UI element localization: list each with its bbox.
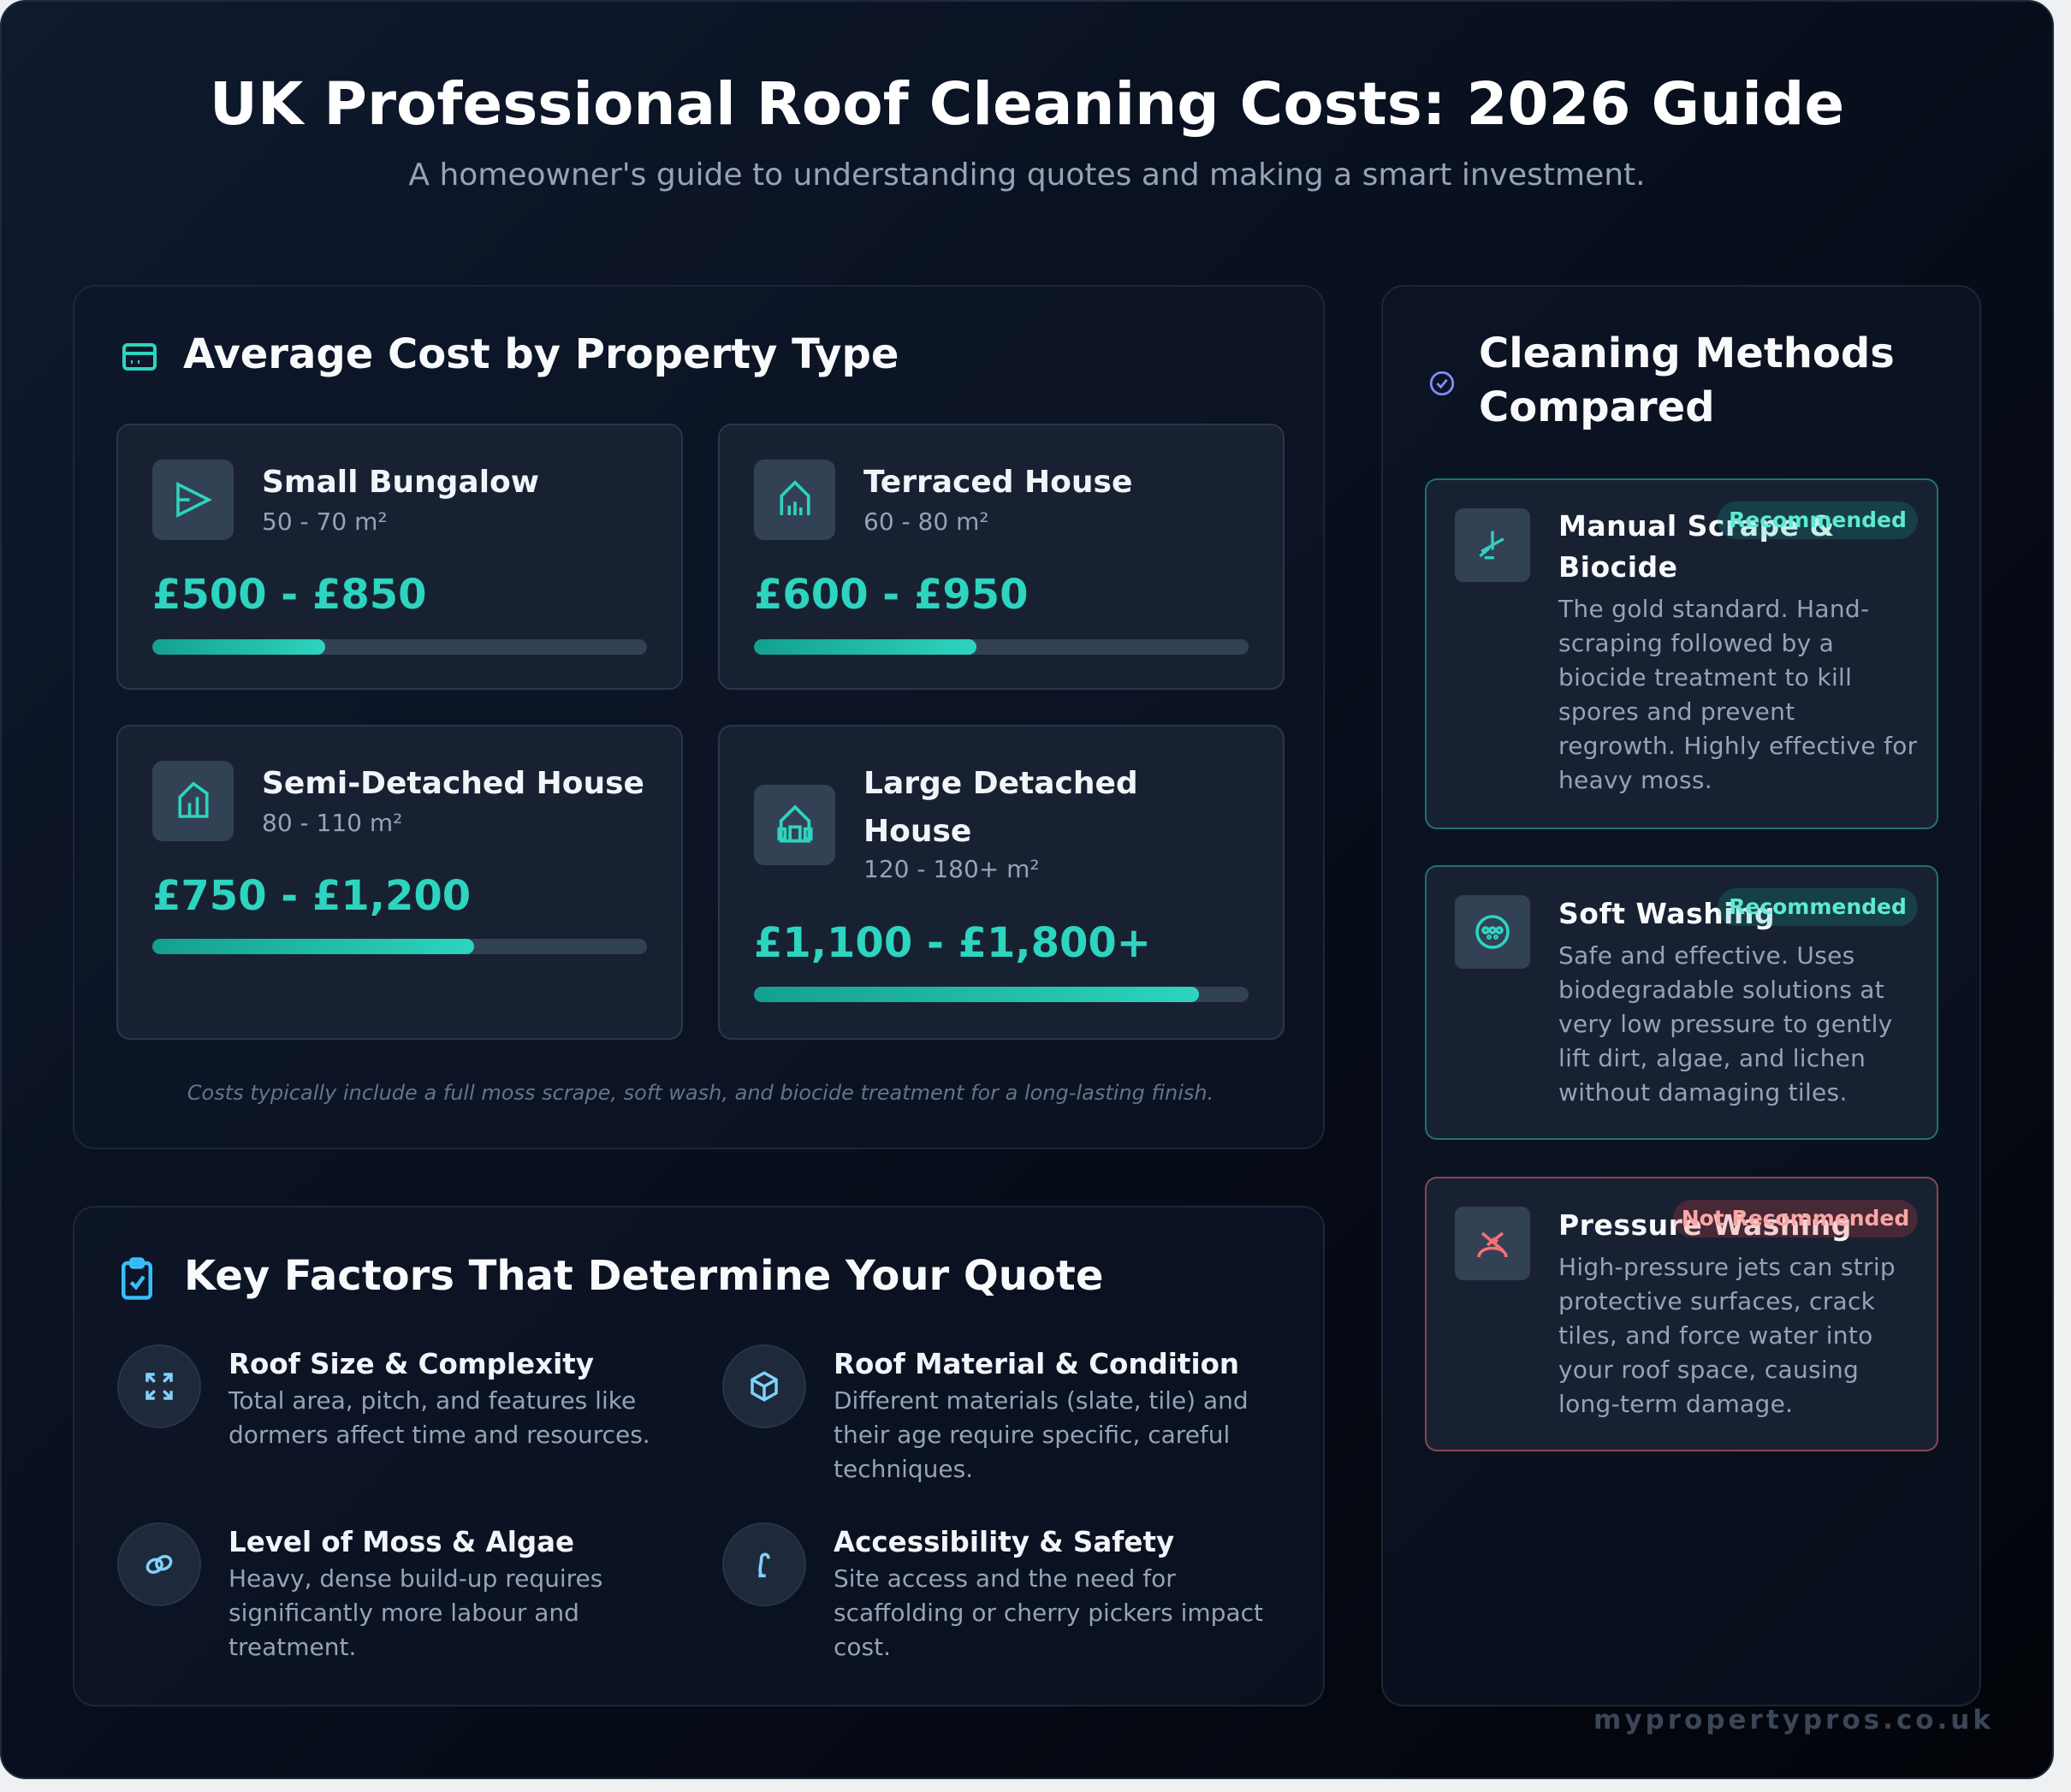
panel: cleaning methods: [1381, 285, 1981, 1706]
heading: Cleaning Methods: [1479, 329, 1895, 377]
factor: accessibility: Site access and the need for scaffolding or cherry pickers impact cost.: [834, 1564, 1263, 1661]
icon: semi: [152, 761, 234, 841]
method: pressure washing: [1425, 1177, 1938, 1451]
factor: material: Roof Material & Condition: [834, 1348, 1239, 1380]
heading: [1479, 329, 1895, 431]
method: soft washing: Soft Washing: [1558, 897, 1775, 930]
card: large detached: £1,100 - £1,800+: [754, 919, 1151, 967]
factor: roof size: Total area, pitch, and features like dormers affect time and resources.: [228, 1386, 650, 1449]
badge: Not Recommended: [1682, 1206, 1909, 1231]
method: manual scrape: Manual Scrape & Biocide: [1558, 509, 1835, 584]
badge: [1718, 888, 1918, 926]
icon: clipboard: [122, 1257, 152, 1300]
card: terraced: Terraced House: [863, 465, 1132, 500]
method: manual scrape: scraping followed by a: [1558, 629, 1834, 657]
method: manual scrape: spores and prevent: [1558, 697, 1795, 726]
card: small bungalow: 50 - 70 m²: [262, 507, 388, 536]
card: terraced: £600 - £950: [754, 571, 1029, 619]
card: small bungalow: £500 - £850: [152, 571, 427, 619]
title: UK Professional Roof Cleaning Costs: 2026 Guide: [210, 70, 1844, 139]
factor: accessibility: [722, 1522, 1263, 1661]
icon: check circle: [1429, 371, 1455, 395]
icon: scrape: [1455, 508, 1530, 582]
panel: average cost: [73, 285, 1325, 1149]
card: large detached: 120 - 180+ m²: [863, 855, 1040, 883]
badge: Recommended: [1729, 894, 1907, 919]
method: manual scrape: biocide treatment to kill: [1558, 663, 1852, 691]
heading: Key Factors That Determine Your Quote: [184, 1252, 1103, 1300]
icon: detached: [754, 785, 835, 865]
card: small bungalow: [116, 424, 683, 690]
icon: soft wash: [1455, 895, 1530, 969]
factor: roof size: Roof Size & Complexity: [228, 1348, 594, 1380]
card: small bungalow: Small Bungalow: [262, 465, 539, 500]
card: large detached: [718, 725, 1285, 1040]
method: pressure washing: High-pressure jets can strip protective surfaces, crack tiles, and force water into your roof space, causing long-term damage.: [1558, 1253, 1896, 1418]
factor: moss: Heavy, dense build-up requires significantly more labour and treatment.: [228, 1564, 602, 1661]
factor: material: Different materials (slate, tile) and their age require specific, careful techniques.: [834, 1386, 1249, 1483]
method: soft washing: Safe and effective. Uses biodegradable solutions at very low pressure to gently lift dirt, algae, and lichen without damaging tiles.: [1558, 941, 1893, 1107]
factor: roof size: [117, 1344, 650, 1449]
method: soft washing: [1425, 865, 1938, 1140]
icon: card: [122, 343, 157, 371]
badge: [1673, 1200, 1918, 1237]
factor: material: [722, 1344, 1249, 1483]
method: manual scrape: The gold standard. Hand-: [1558, 595, 1869, 623]
factor: accessibility: Accessibility & Safety: [834, 1526, 1174, 1558]
method: pressure washing: Pressure Washing: [1558, 1208, 1852, 1242]
card: terraced: 60 - 80 m²: [863, 507, 989, 536]
method: manual scrape: [1425, 478, 1938, 829]
card: semi-detached: Semi-Detached House: [262, 766, 644, 801]
method: manual scrape: regrowth. Highly effective for: [1558, 732, 1917, 760]
card: semi-detached: 80 - 110 m²: [262, 809, 402, 837]
icon: pressure: [1455, 1207, 1530, 1280]
badge: [1718, 501, 1918, 539]
card: semi-detached: [116, 725, 683, 1040]
badge: Recommended: [1729, 507, 1907, 532]
method: manual scrape: heavy moss.: [1558, 766, 1712, 794]
icon: terraced: [754, 460, 835, 540]
card: terraced: [718, 424, 1285, 690]
factor: moss: [117, 1522, 602, 1661]
icon: bungalow: [152, 460, 234, 540]
footnote: Costs typically include a full moss scrape, soft wash, and biocide treatment for a long-lasting finish.: [187, 1081, 1214, 1105]
card: large detached: Large Detached: [863, 766, 1138, 801]
panel: key factors: [73, 1206, 1325, 1706]
heading: Average Cost by Property Type: [183, 330, 899, 378]
card: semi-detached: £750 - £1,200: [152, 872, 471, 920]
factor: moss: Level of Moss & Algae: [228, 1526, 574, 1558]
footer brand: mypropertypros.co.uk: [1593, 1705, 1994, 1736]
card: large detached: House: [863, 814, 971, 849]
heading: Compared: [1479, 383, 1715, 431]
subtitle: A homeowner's guide to understanding quotes and making a smart investment.: [408, 157, 1646, 193]
